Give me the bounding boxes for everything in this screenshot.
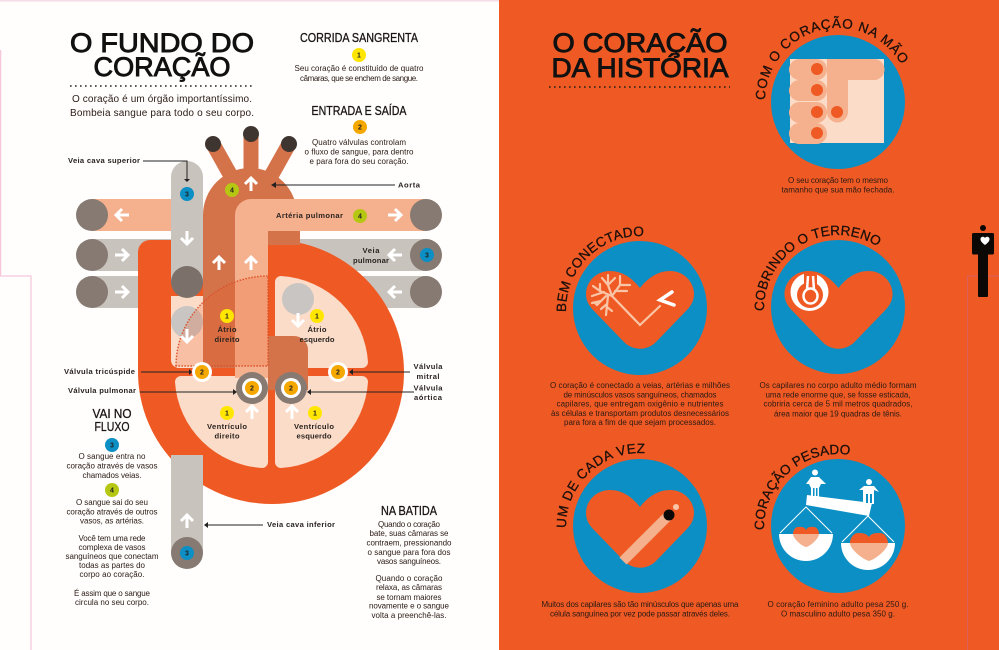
block: na batida: NA BATIDA	[381, 503, 437, 518]
chamber labels: Átrio	[218, 325, 237, 334]
valve labels: Válvula	[414, 362, 443, 371]
icon: capillary tree	[592, 275, 660, 325]
left ventricle chamber	[275, 376, 368, 468]
block: vai no fluxo: vasos, as artérias.	[80, 516, 144, 526]
block: vai no fluxo: 3	[110, 442, 114, 450]
caption	[542, 600, 739, 618]
block: na batida: Quando o coração	[378, 520, 441, 529]
block: na batida: bate, suas câmaras se	[370, 529, 449, 538]
right page background	[499, 0, 999, 650]
dotted rule right	[549, 86, 730, 88]
panel: bem conectado	[550, 226, 730, 427]
vessel labels: Veia cava inferior	[267, 520, 335, 529]
leader lines	[140, 161, 414, 528]
badges 2: 2	[289, 386, 293, 392]
left page background	[0, 0, 499, 650]
icon: left scale pan	[779, 507, 833, 561]
block: vai no fluxo: complexa de vasos	[78, 543, 146, 552]
caption: capilares, que entregam oxigênio e nutrientes	[556, 400, 724, 408]
block: corrida sangrenta: Seu coração é constituído de quatro	[294, 64, 424, 73]
intro text: O coração é um órgão importantíssimo.	[72, 94, 252, 105]
block: vai no fluxo: sanguíneos que conectam	[66, 552, 159, 561]
block: vai no fluxo: O sangue sai do seu	[76, 498, 148, 507]
valve labels: aórtica	[414, 393, 443, 402]
badges 3: 3	[425, 252, 429, 260]
block: vai no fluxo: todas as partes do	[79, 561, 146, 570]
title: O fundo do coração: O FUNDO DO	[70, 28, 254, 58]
lower vena cava	[171, 455, 203, 552]
caption: uma rede enorme que, se fosse esticada,	[766, 390, 910, 400]
curved heading	[566, 453, 714, 528]
block: vai no fluxo: VAI NO	[92, 406, 132, 421]
aorta dome and trunk	[203, 168, 297, 368]
caption: O seu coração tem o mesmo	[788, 176, 889, 185]
panel: coração pesado: CORAÇÃO PESADO	[754, 444, 850, 530]
vessel labels	[68, 156, 421, 529]
aorta branches	[213, 134, 289, 185]
white flow arrows	[115, 178, 402, 528]
vessel labels: Veia	[362, 246, 380, 255]
heart diagram	[76, 126, 442, 569]
icon: hand holding heart	[789, 59, 884, 144]
right ventricle chamber	[175, 376, 268, 468]
dotted atrium overlay	[176, 276, 268, 366]
valve labels: Válvula	[414, 384, 443, 392]
block: corrida sangrenta: 1	[357, 52, 361, 60]
block: vai no fluxo: 4	[110, 488, 114, 494]
block: na batida: o sangue para fora dos	[368, 548, 450, 557]
caption: O coração é conectado a veias, artérias e milhões	[550, 381, 730, 390]
panel: com o coração na mão	[756, 16, 908, 194]
vessel labels: Veia cava superior	[68, 156, 140, 165]
block: na batida	[366, 503, 452, 620]
panel: coração pesado	[754, 444, 908, 618]
vessel labels: Artéria pulmonar	[276, 211, 343, 220]
badges 1: 1	[313, 410, 317, 418]
left atrium chamber	[275, 276, 368, 368]
badges 3	[180, 187, 434, 560]
pulmonary artery	[235, 199, 426, 378]
block: na batida: se tornam maiores	[376, 593, 442, 602]
badges 2: 2	[336, 370, 340, 376]
badges 4: 4	[358, 214, 362, 220]
caption: para fora a fim de que sejam processados.	[564, 418, 716, 427]
badges 1	[220, 309, 324, 420]
caption: O masculino adulto pesa 350 g.	[781, 610, 895, 618]
block: na batida: contraem, pressionando	[366, 538, 452, 548]
panel: cobrindo o terreno: COBRINDO O TERRENO	[754, 226, 880, 310]
aorta dark ends	[205, 126, 297, 152]
chamber labels: esquerdo	[300, 335, 335, 344]
icon: right scale pan	[841, 516, 895, 570]
block: vai no fluxo	[66, 406, 159, 607]
block: vai no fluxo: chamados veias.	[82, 471, 142, 480]
badges 1: 1	[225, 314, 229, 320]
block: vai no fluxo: O sangue entra no	[78, 452, 146, 461]
heart outer wall	[138, 240, 404, 504]
panel: um de cada vez: UM DE CADA VEZ	[556, 444, 645, 528]
chamber labels: Ventrículo	[294, 422, 334, 431]
caption: cobriria cerca de 5 mil metros quadrados,	[764, 400, 912, 408]
title: O fundo do coração	[70, 28, 254, 82]
caption	[760, 381, 917, 418]
block: entrada e saída: ENTRADA E SAÍDA	[312, 103, 407, 118]
title: O fundo do coração: CORAÇÃO	[94, 51, 230, 82]
heart	[586, 490, 694, 568]
vessel end caps	[76, 199, 442, 308]
pulmonary artery left branch	[92, 199, 171, 231]
chamber labels: Ventrículo	[207, 422, 247, 431]
heart	[784, 271, 892, 349]
intro text: Bombeia sangue para todo o seu corpo.	[70, 108, 254, 119]
block: na batida: Quando o coração	[376, 574, 443, 583]
block: vai no fluxo: coração através de vasos	[66, 462, 158, 470]
caption	[782, 176, 894, 194]
block: vai no fluxo: É assim que o sangue	[74, 589, 151, 598]
valve labels: Válvula pulmonar	[68, 386, 136, 395]
block: na batida: vasos sanguíneos.	[377, 557, 441, 566]
caption	[550, 381, 730, 427]
block: corrida sangrenta: câmaras, que se enchem de sangue.	[300, 74, 418, 83]
badges 4	[225, 183, 367, 223]
icon: white arrow	[660, 292, 674, 305]
block: entrada e saída	[304, 103, 414, 166]
badges 2: 2	[250, 386, 254, 392]
aorta rear part	[268, 231, 300, 245]
dotted rule left	[70, 85, 254, 87]
chamber labels: direito	[214, 432, 240, 440]
caption: de minúsculos vasos sanguíneos, chamados	[564, 390, 716, 400]
block: na batida: novamente e o sangue	[369, 602, 450, 610]
valve rings	[192, 362, 348, 404]
block: entrada e saída: e para fora do seu coração.	[310, 157, 408, 166]
chamber labels	[207, 325, 335, 440]
badges 2: 2	[200, 370, 204, 376]
badges 1: 1	[315, 314, 319, 320]
block: vai no fluxo: circula no seu corpo.	[75, 598, 149, 607]
chamber labels: Átrio	[308, 325, 327, 334]
vessel labels: Aorta	[398, 180, 421, 190]
badges 1: 1	[225, 410, 229, 418]
panel: um de cada vez	[542, 444, 739, 618]
block: corrida sangrenta: CORRIDA SANGRENTA	[300, 31, 419, 45]
icon: capillary with blood cell	[623, 504, 679, 561]
aorta lower part	[268, 336, 308, 390]
block: entrada e saída: o fluxo de sangue, para dentro	[304, 148, 414, 156]
badges 3: 3	[185, 550, 189, 558]
caption: Muitos dos capilares são tão minúsculos que apenas uma	[542, 600, 739, 609]
block: corrida sangrenta	[294, 31, 424, 83]
valve labels: Válvula tricúspide	[64, 367, 135, 376]
icon: man figure	[859, 479, 879, 504]
block: vai no fluxo: coração através de outros	[66, 508, 158, 516]
valve labels: mitral	[416, 372, 440, 381]
curved heading	[765, 28, 911, 102]
caption: O coração feminino adulto pesa 250 g.	[768, 600, 908, 609]
caption: Os capilares no corpo adulto médio formam	[760, 381, 917, 390]
right atrium chamber	[171, 296, 268, 368]
badges 2	[195, 365, 345, 395]
block: na batida: volta a preenchê-las.	[372, 611, 446, 620]
badges 4: 4	[230, 188, 234, 194]
block: na batida: relaxa, as câmaras	[376, 583, 442, 592]
lower light vein circle	[171, 306, 203, 338]
pulmonary vein bands	[92, 239, 426, 308]
valve labels	[64, 362, 443, 402]
icon: black side marker	[972, 225, 994, 297]
chamber labels: esquerdo	[296, 432, 332, 440]
curved heading	[764, 454, 912, 530]
curved heading	[764, 235, 912, 311]
intro text	[70, 94, 254, 119]
upper vena cava	[171, 161, 203, 282]
left atrium gray circle	[282, 283, 314, 315]
icon: tennis court	[790, 272, 828, 311]
badges 3: 3	[185, 192, 189, 198]
title: O coração da história: O CORAÇÃO	[552, 27, 728, 58]
caption: às células e transportam produtos desnecessários	[551, 409, 729, 418]
caption: área maior que 19 quadras de tênis.	[774, 410, 902, 418]
block: vai no fluxo: corpo ao coração.	[80, 570, 144, 579]
panel: com o coração na mão: COM O CORAÇÃO NA MÃO	[756, 16, 908, 100]
vessel labels: pulmonar	[353, 256, 389, 265]
block: vai no fluxo: FLUXO	[94, 419, 130, 434]
panel: cobrindo o terreno	[754, 226, 917, 418]
title: O coração da história: DA HISTÓRIA	[552, 52, 728, 83]
curved heading	[566, 236, 714, 312]
icon: scale beam	[806, 495, 872, 516]
panel: bem conectado: BEM CONECTADO	[556, 226, 644, 312]
caption	[768, 600, 908, 618]
chamber labels: direito	[214, 335, 240, 344]
block: entrada e saída: 2	[358, 124, 362, 132]
block: entrada e saída: Quatro válvulas controlam	[312, 138, 406, 147]
orange strip right	[308, 369, 328, 375]
caption: célula sanguínea por vez pode passar através deles.	[550, 610, 730, 618]
block: vai no fluxo: Você tem uma rede	[78, 534, 146, 543]
title: O coração da história	[552, 27, 728, 83]
caption: tamanho que sua mão fechada.	[782, 186, 894, 194]
heart	[586, 271, 694, 349]
icon: woman figure	[806, 470, 826, 497]
